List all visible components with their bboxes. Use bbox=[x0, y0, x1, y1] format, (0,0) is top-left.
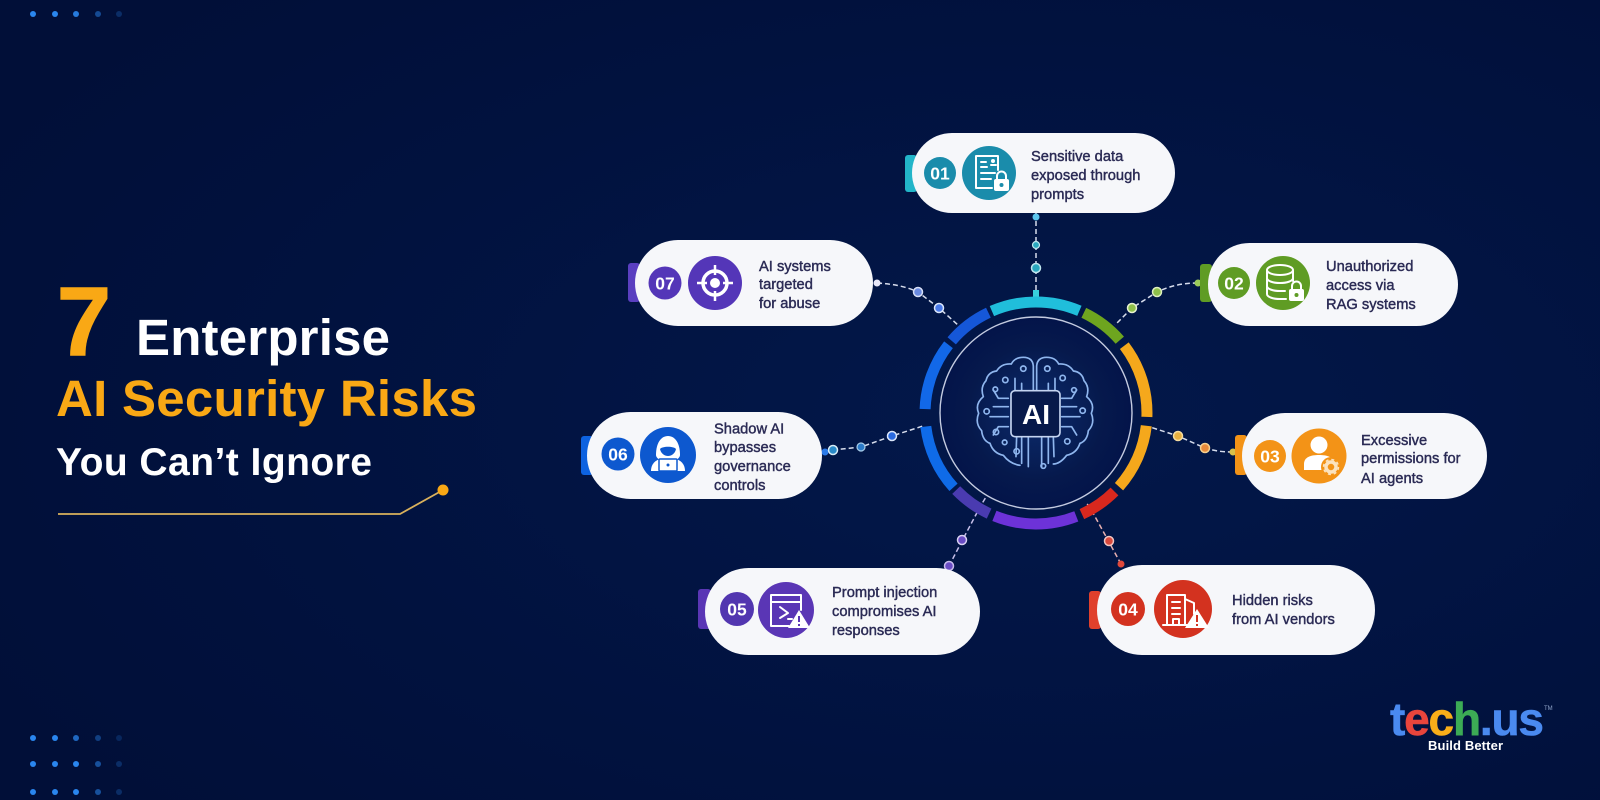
text: risk 02: access via bbox=[1326, 278, 1395, 294]
text: risk 05: responses bbox=[832, 623, 900, 639]
logo: tech.us: TM bbox=[1544, 706, 1553, 712]
connector 07 bbox=[874, 280, 958, 325]
icon: buildings with warning bbox=[1154, 580, 1212, 638]
title: You Can’t Ignore bbox=[56, 441, 372, 484]
connector 04 bbox=[1086, 502, 1124, 568]
panel: risk 07 bbox=[628, 240, 873, 326]
title: 7 bbox=[57, 267, 111, 376]
panel: risk 04: 04 bbox=[1118, 600, 1138, 620]
text: risk 01: prompts bbox=[1031, 187, 1084, 203]
text: risk 01 bbox=[1031, 149, 1140, 203]
text: risk 06: controls bbox=[714, 478, 765, 494]
text: risk 01: Sensitive data bbox=[1031, 149, 1124, 165]
connector 01 bbox=[1032, 213, 1040, 298]
text: risk 07: AI systems bbox=[759, 259, 831, 275]
text: risk 02: Unauthorized bbox=[1326, 259, 1413, 275]
text: risk 03: Excessive bbox=[1361, 433, 1427, 449]
connector 06 bbox=[822, 426, 923, 456]
icon: target crosshair bbox=[688, 256, 742, 310]
text: risk 06 bbox=[714, 422, 791, 494]
text: risk 04: Hidden risks bbox=[1232, 593, 1313, 609]
text: risk 01: exposed through bbox=[1031, 168, 1140, 184]
title underline accent bbox=[58, 484, 448, 514]
text: risk 06: governance bbox=[714, 459, 791, 475]
text: risk 07: targeted bbox=[759, 277, 813, 293]
icon: AI brain bbox=[977, 357, 1093, 468]
panel: risk 05 bbox=[698, 568, 980, 655]
decorative dots: top left bbox=[30, 11, 122, 17]
icon: hooded hacker with laptop bbox=[640, 427, 696, 483]
icon: terminal with warning bbox=[758, 582, 814, 638]
logo: tech.us: tech.us bbox=[1390, 693, 1544, 745]
text: risk 07: for abuse bbox=[759, 296, 820, 312]
connector 03 bbox=[1150, 427, 1236, 456]
central hub disc bbox=[940, 317, 1132, 509]
panel: risk 01 bbox=[905, 133, 1175, 213]
panel: risk 05: 05 bbox=[727, 600, 747, 620]
panel: risk 01: 01 bbox=[930, 164, 950, 184]
text: risk 03: permissions for bbox=[1361, 451, 1461, 467]
text: risk 04 bbox=[1232, 593, 1335, 628]
icon: person with gear bbox=[1292, 428, 1346, 484]
panel: risk 06: 06 bbox=[608, 444, 628, 464]
panel: risk 04 bbox=[1089, 565, 1375, 655]
panel: risk 02 bbox=[1200, 243, 1458, 326]
title: Enterprise bbox=[136, 309, 390, 366]
decorative dots: bottom left bbox=[30, 735, 122, 795]
text: risk 06: Shadow AI bbox=[714, 422, 784, 438]
panel: risk 07: 07 bbox=[655, 274, 675, 294]
text: risk 03 bbox=[1361, 433, 1461, 487]
text: risk 05: compromises AI bbox=[832, 604, 936, 620]
panel: risk 02: 02 bbox=[1224, 274, 1244, 294]
connector 02 bbox=[1115, 280, 1202, 325]
text: risk 03: AI agents bbox=[1361, 471, 1423, 487]
text: risk 05: Prompt injection bbox=[832, 585, 937, 601]
icon: database with lock bbox=[1256, 256, 1310, 310]
connector 05 bbox=[944, 497, 986, 570]
segmented ring bbox=[925, 302, 1147, 524]
icon: AI brain: AI bbox=[1022, 399, 1050, 430]
text: risk 05 bbox=[832, 585, 937, 639]
title bbox=[56, 267, 477, 484]
text: risk 06: bypasses bbox=[714, 440, 776, 456]
icon: document with lock bbox=[962, 146, 1016, 200]
title: AI Security Risks bbox=[56, 370, 477, 427]
logo: tech.us: Build Better bbox=[1428, 738, 1503, 753]
text: risk 02 bbox=[1326, 259, 1416, 313]
text: risk 02: RAG systems bbox=[1326, 297, 1416, 313]
panel: risk 03: 03 bbox=[1260, 446, 1280, 466]
panel: risk 03 bbox=[1235, 413, 1487, 499]
panel: risk 06 bbox=[581, 412, 822, 499]
text: risk 04: from AI vendors bbox=[1232, 612, 1335, 628]
text: risk 07 bbox=[759, 259, 831, 312]
